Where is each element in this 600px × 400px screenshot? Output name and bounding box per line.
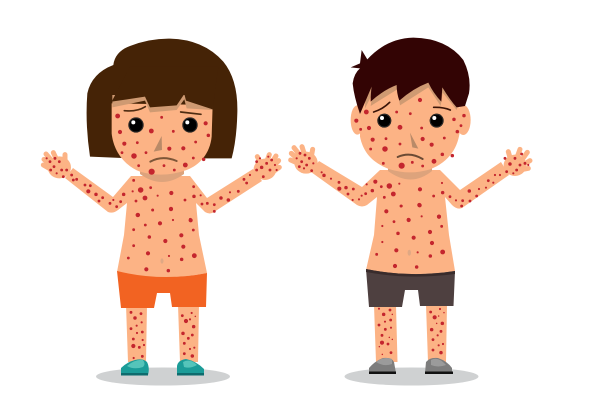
- rash spots on lower torso and legs: girl: [127, 207, 196, 359]
- chin shadow: girl: [140, 170, 184, 182]
- legs: girl: [126, 305, 199, 362]
- eyebrows: boy: [374, 102, 450, 112]
- belly button: girl: [160, 258, 164, 264]
- hands: girl: [43, 153, 279, 180]
- shorts: girl: [117, 271, 207, 308]
- ground shadow: girl: [96, 368, 230, 386]
- hair shadow: boy: [365, 77, 465, 110]
- eyes: girl: [128, 117, 198, 133]
- ears: boy: [351, 105, 471, 135]
- eyes: boy: [377, 114, 444, 128]
- hands: boy: [291, 147, 530, 176]
- rash spots on head and upper body: girl: [46, 114, 277, 220]
- legs: boy: [374, 305, 447, 362]
- figure: girl: [43, 39, 279, 385]
- body and arms: boy: [311, 161, 509, 274]
- face: girl: [112, 67, 218, 175]
- hair: boy: [351, 38, 470, 114]
- chin shadow: boy: [388, 168, 432, 180]
- shoes: girl: [121, 359, 204, 376]
- shoes: boy: [369, 358, 453, 374]
- belly button: boy: [408, 250, 411, 256]
- shorts: boy: [366, 269, 455, 307]
- head: boy: [351, 38, 471, 172]
- mouth: girl: [150, 158, 177, 162]
- figure: boy: [291, 38, 530, 386]
- eyebrows: girl: [124, 107, 201, 114]
- nose: girl: [154, 136, 162, 152]
- nose: boy: [410, 133, 418, 149]
- body and arms: girl: [65, 168, 262, 277]
- mouth: boy: [398, 155, 423, 159]
- rash spots on head and upper body: boy: [296, 98, 529, 220]
- ground shadow: boy: [344, 368, 478, 386]
- rash spots on lower torso and legs: boy: [376, 204, 445, 355]
- face: boy: [360, 73, 460, 172]
- hair back: girl: [87, 39, 237, 158]
